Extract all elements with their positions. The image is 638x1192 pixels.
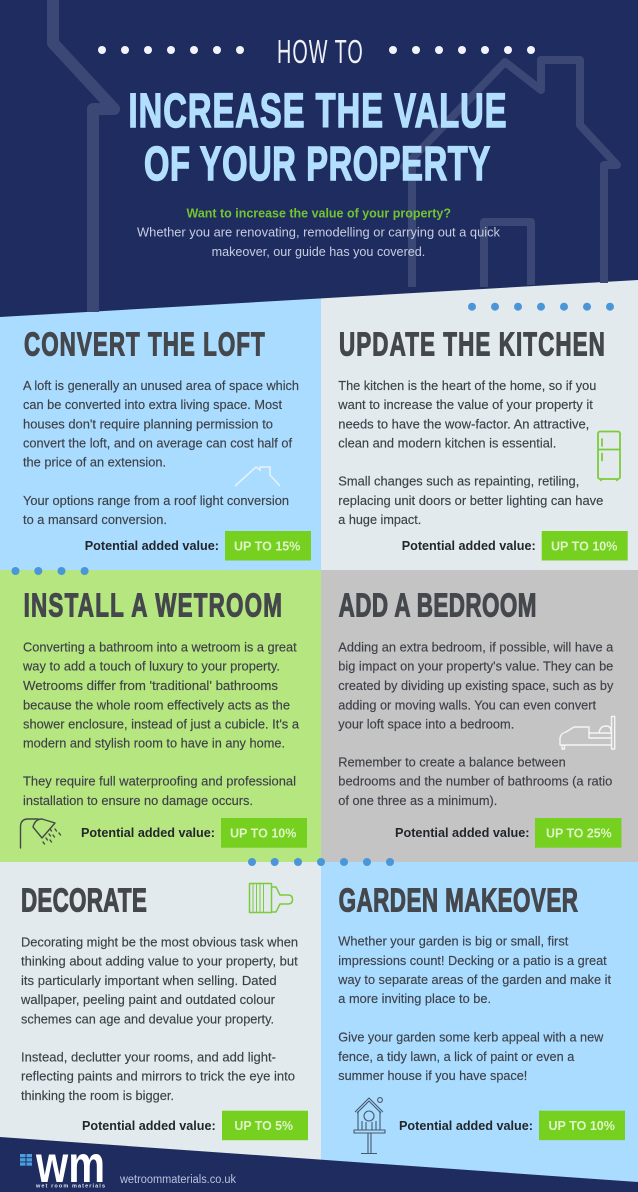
heading: convert the loft: CONVERT THE LOFT [24,325,265,363]
body: add a bedroom: adding or moving walls. You can even convert [338,697,596,712]
header background [0,0,638,317]
body: decorate: reflecting paints and mirrors to trick the eye into [21,1069,295,1084]
footer background [0,1137,638,1192]
body: decorate: Decorating might be the most obvious task when [21,935,298,950]
value badge: garden: UP TO 10% [548,1118,615,1133]
value label: kitchen: Potential added value: [402,538,536,553]
value label: decorate: Potential added value: [82,1118,216,1133]
section: update the kitchen [337,325,628,560]
body: update the kitchen: The kitchen is the heart of the home, so if you [338,378,596,393]
body: convert the loft: to a mansard conversion. [23,512,167,527]
body: add a bedroom: of one three as a minimum). [338,793,497,808]
dots: top right [468,303,614,311]
panel: add a bedroom background [321,570,638,862]
value badge: kitchen [542,531,628,560]
value label: bedroom: Potential added value: [395,825,530,840]
intro text: Want to increase the value of your property? [186,206,451,220]
body: garden makeover: impressions count! Decking or a patio is a great [338,953,607,968]
body: decorate: schemes can age and devalue your property. [21,1011,274,1026]
value badge: loft: UP TO 15% [234,538,301,554]
value badge: loft [225,531,311,560]
body: garden makeover: a more inviting place to be. [338,991,491,1006]
body: install a wetroom: way to add a touch of luxury to your property. [22,659,280,674]
footer website: wetroommaterials.co.uk [119,1174,236,1186]
header dots right [389,46,535,54]
icon: shower [20,819,60,848]
value badge: kitchen: UP TO 10% [551,538,618,554]
house outline illustration [53,0,617,312]
value badge: bedroom [535,818,622,848]
body: install a wetroom: shower enclosure, instead of just a cubicle. It's a [23,716,300,731]
body: add a bedroom: your loft space into a bedroom. [338,716,514,731]
body: convert the loft: convert the loft, and on average can cost half of [23,435,292,450]
body: add a bedroom: big impact on your property's value. They can be [338,659,613,674]
footer logo [20,1136,105,1192]
body: install a wetroom: because the whole room effectively acts as the [23,697,290,712]
body: garden makeover: fence, a tidy lawn, a lick of paint or even a [338,1049,575,1064]
body: update the kitchen: a huge impact. [338,512,421,527]
icon: bed [560,716,615,749]
dots: center [248,858,394,866]
body: convert the loft: houses don't require planning permission to [23,416,273,431]
panel: convert the loft background [0,280,321,570]
body: update the kitchen: replacing unit doors or better lighting can have [338,493,603,508]
body: add a bedroom: bedrooms and the number of bathrooms (a ratio [338,774,612,789]
body: convert the loft: can be converted into extra living space. Most [23,397,282,412]
body: garden makeover [337,934,611,1083]
title: OF YOUR PROPERTY [144,137,490,191]
heading: add a bedroom: ADD A BEDROOM [339,586,536,624]
body: decorate: Instead, declutter your rooms, and add light- [21,1050,276,1065]
icon: roof [235,467,280,486]
header dots left [98,46,244,54]
heading: decorate: DECORATE [21,881,147,919]
section: decorate [20,881,308,1140]
value badge: wetroom [221,818,307,848]
body: decorate: thinking about adding value to your property, but [21,954,298,969]
section: install a wetroom [20,586,307,848]
value badge: bedroom: UP TO 25% [546,826,612,840]
body: update the kitchen: clean and modern kitchen is essential. [338,435,556,450]
panel: update the kitchen background [321,270,638,570]
panel: garden makeover background [321,862,638,1187]
icon: fridge [598,432,620,480]
body: add a bedroom: Adding an extra bedroom, if possible, will have a [338,640,614,655]
body: update the kitchen [337,378,603,527]
value label: garden: Potential added value: [399,1118,533,1133]
icon: bird house [354,1098,385,1154]
body: garden makeover: Give your garden some kerb appeal with a new [338,1030,604,1045]
body: install a wetroom: Wetrooms differ from 'traditional' bathrooms [23,678,279,693]
body: install a wetroom: modern and stylish room to have in any home. [23,735,285,750]
intro text: Whether you are renovating, remodelling or carrying out a quick [137,225,500,240]
body: add a bedroom [338,640,614,808]
panel: install a wetroom background [0,570,321,862]
intro text: makeover, our guide has you covered. [212,244,425,259]
body: convert the loft: Your options range from a roof light conversion [23,493,289,508]
icon: paint brush [250,884,292,912]
heading: install a wetroom: INSTALL A WETROOM [24,586,282,624]
body: decorate [20,935,298,1103]
body: convert the loft: the price of an extension. [23,455,166,470]
body: install a wetroom: Converting a bathroom into a wetroom is a great [23,640,297,655]
body: decorate: thinking the room is bigger. [21,1088,174,1103]
body: decorate: wallpaper, peeling paint and outdated colour [20,992,276,1007]
logo tagline: wet room materials [35,1184,105,1190]
title [128,84,507,191]
body: install a wetroom [22,640,300,808]
title: INCREASE THE VALUE [128,84,507,138]
logo squares [20,1154,32,1166]
value badge: garden [539,1111,625,1140]
body: update the kitchen: Small changes such as repainting, retiling, [338,474,579,489]
body: add a bedroom: created by dividing up existing space, such as by [338,678,614,693]
body: garden makeover: summer house if you have space! [338,1068,527,1083]
intro text [137,206,500,259]
kicker: how to: HOW TO [277,33,363,70]
panel: decorate background [0,862,321,1162]
value label: loft: Potential added value: [85,538,219,553]
body: garden makeover: Whether your garden is big or small, first [338,934,569,949]
heading: garden makeover: GARDEN MAKEOVER [339,881,578,919]
body: install a wetroom: installation to ensure no damage occurs. [23,793,253,808]
value badge: decorate: UP TO 5% [234,1118,293,1133]
value label: wetroom: Potential added value: [81,825,215,840]
value badge: decorate [222,1111,308,1140]
body: install a wetroom: They require full waterproofing and professional [23,774,296,789]
dots: left [12,567,89,575]
section: garden makeover [337,881,625,1154]
body: convert the loft: A loft is generally an unused area of space which [23,378,299,393]
body: decorate: its particularly important when selling. Dated [21,973,277,988]
body: add a bedroom: Remember to create a balance between [338,755,566,770]
body: update the kitchen: want to increase the value of your property it [337,397,593,412]
body: convert the loft [23,378,299,527]
body: update the kitchen: needs to have the wow-factor. An attractive, [338,416,589,431]
section: add a bedroom [338,586,622,848]
section: convert the loft [23,325,311,560]
body: garden makeover: way to separate areas of the garden and make it [337,972,611,987]
heading: update the kitchen: UPDATE THE KITCHEN [339,325,605,363]
value badge: wetroom: UP TO 10% [230,826,297,840]
